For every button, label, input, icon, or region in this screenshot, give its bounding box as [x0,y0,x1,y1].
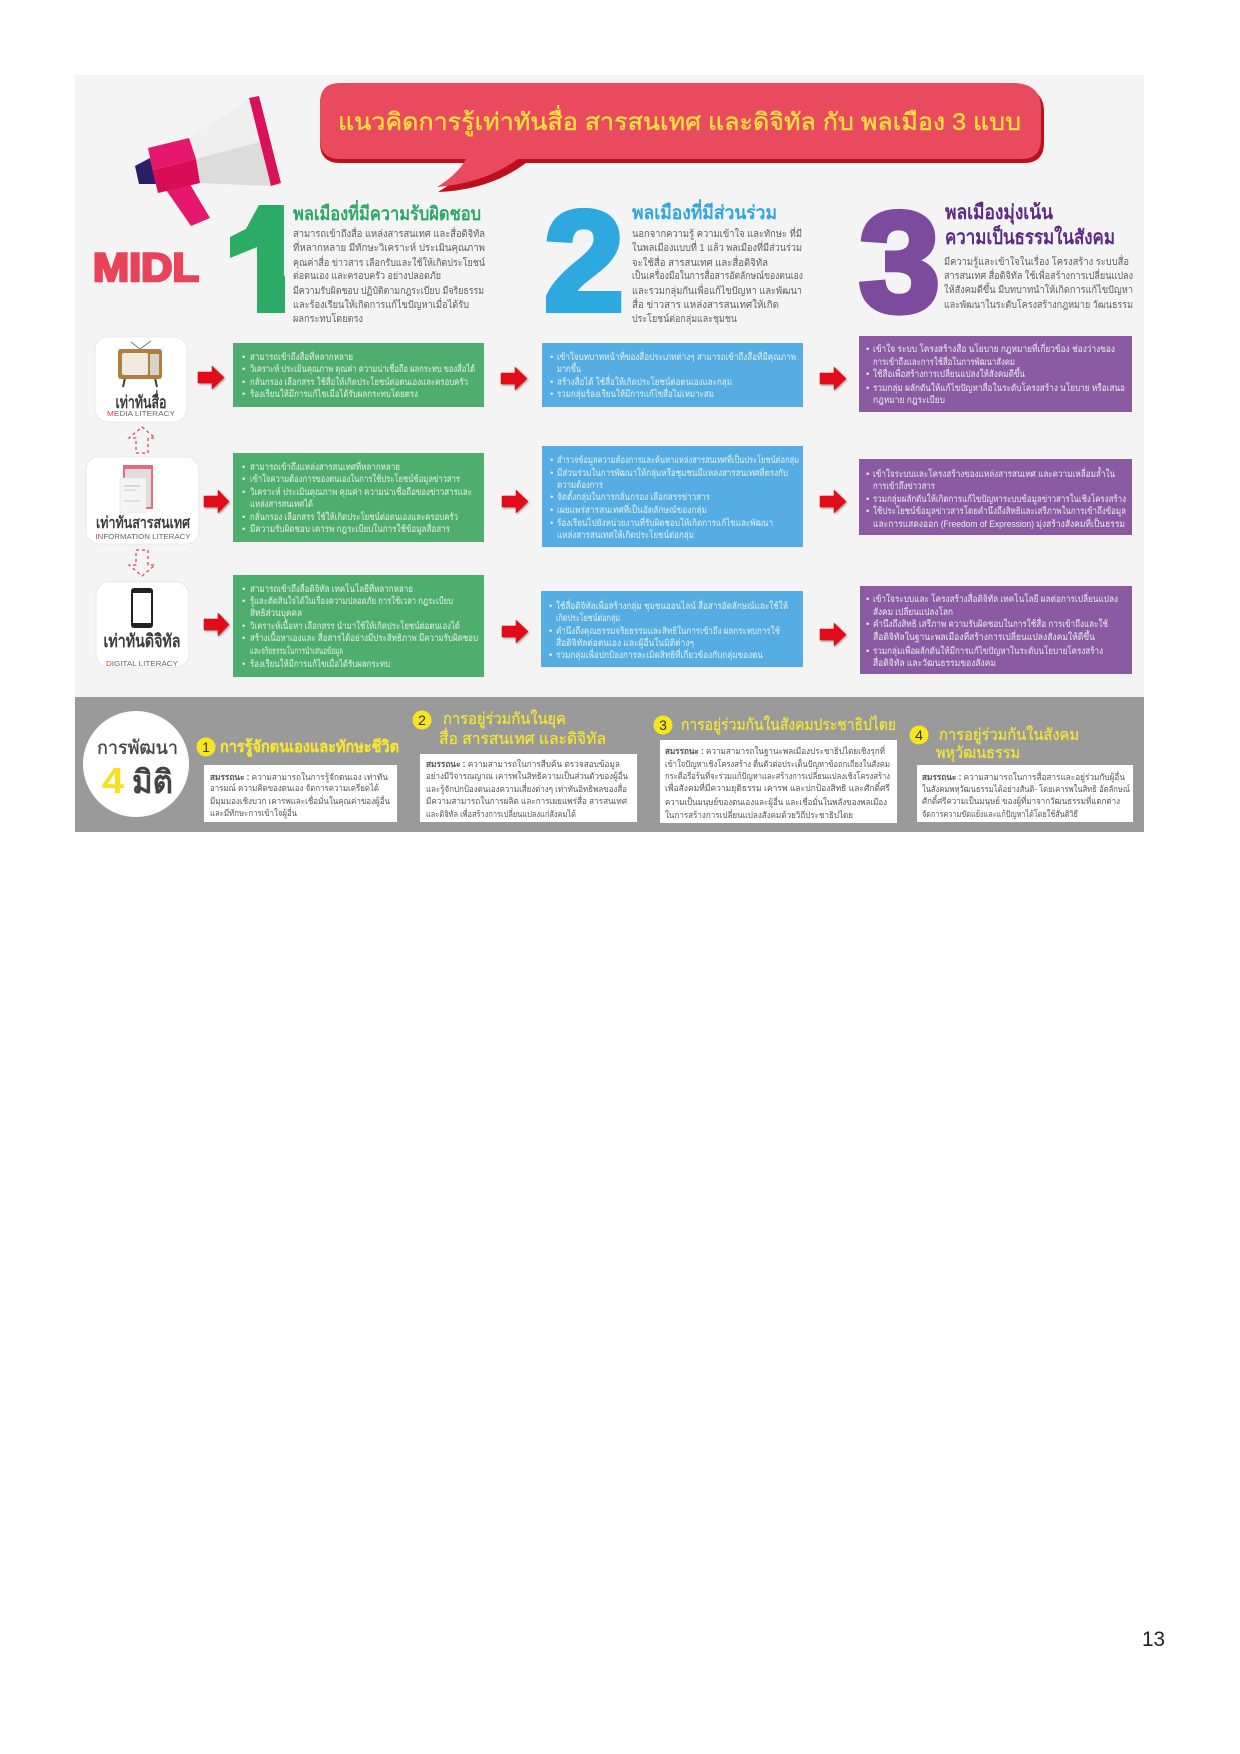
citizen type 1 description: ต่อตนเอง และครอบครัว อย่างปลอดภัย [293,271,441,282]
panel: blue information literacy: • [550,492,553,503]
dimension 3: ในการสร้างการเปลี่ยนแปลงสังคมด้วยวิถีประชาธิปไตย [665,809,853,820]
dimension 1 [196,737,399,822]
dimension 4: ศักดิ์ศรีความเป็นมนุษย์ ของผู้ที่มาจากวัฒนธรรมที่แตกต่าง [922,794,1120,807]
panel: blue information literacy: เผยแพร่สารสนเทศที่เป็นอัตลักษณ์ของกลุ่ม [557,503,707,516]
dimension 4: จัดการความขัดแย้งและแก้ปัญหาได้โดยใช้สันติวิธี [922,809,1078,819]
citizen type 2 description [632,226,803,325]
arrow: digital to purple [820,623,846,646]
panel: purple media literacy: การเข้าถึงและการใช้สื่อในการพัฒนาสังคม [873,355,1015,368]
arrow: media to green [198,366,224,389]
dimension 3: 3 [659,717,667,733]
citizen type 1 heading: พลเมืองที่มีความรับผิดชอบ [293,200,481,225]
citizen type 2 description: และรวมกลุ่มกันเพื่อแก้ไขปัญหา และพัฒนา [632,283,802,297]
panel: blue information literacy: แหล่งสารสนเทศให้เกิดประโยชน์ต่อกลุ่ม [557,529,694,541]
panel: purple information literacy: รวมกลุ่มผลักดันให้เกิดการแก้ไขปัญหาระบบข้อมูลข่าวสารในเชิงโครงสร้าง [873,493,1126,505]
panel: green information literacy: วิเคราะห์ ประเมินคุณภาพ คุณค่า ความน่าเชื่อถือของข่าวสารและ [249,485,472,498]
panel: green information literacy: • [242,487,245,498]
panel: purple information literacy: • [866,494,869,505]
badge: four dimensions: การพัฒนา [97,738,178,759]
citizen type 2 description: สื่อ ข่าวสาร แหล่งสารสนเทศให้เกิด [632,297,779,311]
panel: blue media literacy: • [550,389,553,400]
panel: green information literacy: • [242,462,245,473]
icon: megaphone [135,96,281,226]
panel: purple media literacy: เข้าใจ ระบบ โครงสร้างสื่อ นโยบาย กฎหมายที่เกี่ยวข้อง ช่องว่างของ [873,342,1115,355]
panel: blue media literacy: มากขึ้น [557,362,581,375]
panel: green media literacy: • [242,364,245,375]
citizen type 1 description: คุณค่าสื่อ ข่าวสาร เลือกรับและใช้ให้เกิดประโยชน์ [293,255,485,269]
arrow: digital to green [204,613,229,636]
panel: green information literacy [233,453,484,542]
panel: green information literacy: • [242,512,245,523]
panel: purple digital literacy: รวมกลุ่มเพื่อผลักดันให้มีการแก้ไขปัญหาในระดับนโยบายโครงสร้าง [873,644,1103,657]
panel: green digital literacy: ร้องเรียนให้มีการแก้ไขเมื่อได้รับผลกระทบ [250,657,390,670]
panel: purple digital literacy [860,586,1132,674]
citizen type 2 description: ประโยชน์ต่อกลุ่มและชุมชน [632,312,737,325]
icon: smartphone [131,588,153,628]
panel: purple digital literacy: เข้าใจระบบและ โครงสร้างสื่อดิจิทัล เทคโนโลยี ผลต่อการเปลี่ยนแปลง [873,592,1118,605]
panel: blue media literacy: • [550,352,553,363]
panel: green information literacy: กลั่นกรอง เลือกสรร ใช้ให้เกิดประโยชน์ต่อตนเองและครอบครัว [250,510,458,523]
badge: four dimensions: มิติ [132,764,173,800]
dimension 2 [412,709,637,822]
panel: green information literacy: • [242,524,245,535]
dimension 2: อย่างมีวิจารณญาณ เคารพในสิทธิความเป็นส่วนตัวของผู้อื่น [426,770,628,782]
panel: green media literacy: วิเคราะห์ ประเมินคุณภาพ คุณค่า ความน่าเชื่อถือ ผลกระทบ ของสื่อได้ [249,362,475,375]
panel: green media literacy: • [242,352,245,363]
panel: blue digital literacy: สื่อดิจิทัลต่อตนเอง และผู้อื่นในมิติต่างๆ [556,636,694,649]
MIDL label: MIDL [93,246,199,290]
dimension 2: สื่อ สารสนเทศ และดิจิทัล [439,727,606,748]
panel: green digital literacy: รู้และตัดสินใจได้ในเรื่องความปลอดภัย การใช้เวลา กฎระเบียบ [250,594,453,607]
panel: green digital literacy: • [242,584,245,595]
panel: green digital literacy: สามารถเข้าถึงสื่อดิจิทัล เทคโนโลยีที่หลากหลาย [250,582,413,595]
citizen type 3 heading [945,201,1115,249]
panel: green media literacy: ร้องเรียนให้มีการแก้ไขเมื่อได้รับผลกระทบโดยตรง [250,387,418,400]
citizen type 1 description: ผลกระทบโดยตรง [293,312,363,325]
dimension 3: การอยู่ร่วมกันในสังคมประชาธิปไตย [681,715,896,735]
panel: purple information literacy: และการแสดงออก (Freedom of Expression) มุ่งสร้างสังคมที่เป็นธรรม [873,517,1125,530]
dimension 3: ความเป็นมนุษย์ของตนเองและผู้อื่น และเชื่อมั่นในพลังของพลเมือง [665,796,887,808]
panel: blue digital literacy: • [549,650,552,661]
panel: blue digital literacy: • [549,626,552,637]
dimension 4 [910,725,1133,822]
panel: blue media literacy [542,343,803,407]
panel: green media literacy: กลั่นกรอง เลือกสรร ใช้สื่อให้เกิดประโยชน์ต่อตนเองและครอบครัว [250,375,468,388]
panel: blue information literacy: มีส่วนร่วมในการพัฒนาให้กลุ่มหรือชุมชนมีแหล่งสารสนเทศที่ตรงกับ [557,466,788,479]
dimension 4: สมรรถนะ : ความสามารถในการสื่อสารและอยู่ร่วมกับผู้อื่น [922,771,1125,783]
page number: 13 [1142,1628,1165,1651]
panel: blue information literacy: • [550,468,553,479]
panel: blue information literacy [542,446,803,547]
panel: purple media literacy: • [866,344,869,355]
panel: blue digital literacy: เกิดประโยชน์ต่อกลุ่ม [556,612,620,624]
panel: blue information literacy: • [550,455,553,466]
citizen type 3 description: มีความรู้และเข้าใจในเรื่อง โครงสร้าง ระบบสื่อ [944,254,1129,268]
arrow: dashed up [129,427,155,453]
dimension 2: 2 [418,712,426,728]
badge: four dimensions [83,711,189,817]
panel: green digital literacy: และจริยธรรมในการนำเสนอข้อมูล [250,645,343,657]
citizen type 2 description: ในพลเมืองแบบที่ 1 แล้ว พลเมืองที่มีส่วนร่วม [632,240,802,254]
panel: green media literacy [233,343,484,407]
dimension 1: สมรรถนะ : ความสามารถในการรู้จักตนเอง เท่าทัน [210,772,388,783]
panel: green digital literacy: • [242,659,245,670]
panel: purple information literacy: • [866,469,869,480]
citizen type 1 description: และร้องเรียนให้เกิดการแก้ไขปัญหาเมื่อได้รับ [293,297,469,311]
icon: television [118,341,162,387]
panel: purple digital literacy: • [866,619,869,630]
card: media literacy [95,337,187,422]
panel: purple media literacy: รวมกลุ่ม ผลักดันให้แก้ไขปัญหาสื่อในระดับโครงสร้าง นโยบาย หรือเสนอ [873,381,1125,394]
panel: green media literacy: สามารถเข้าถึงสื่อที่หลากหลาย [250,350,353,363]
panel: green digital literacy: • [242,621,245,632]
panel: purple digital literacy: สังคม เปลี่ยนแปลงโลก [873,605,953,618]
panel: green digital literacy [233,575,484,677]
panel: blue media literacy: รวมกลุ่มร้องเรียนให้มีการแก้ไขสื่อไม่เหมาะสม [557,387,714,400]
panel: green digital literacy: สิทธิส่วนบุคคล [250,608,302,619]
panel: blue information literacy: ความต้องการ [557,480,603,491]
badge: four dimensions: 4 [102,760,124,801]
media literacy Thai label: เท่าทันสื่อ [116,390,166,412]
dimension 3: สมรรถนะ : ความสามารถในฐานะพลเมืองประชาธิปไตยเชิงรุกที่ [665,745,885,757]
panel: blue information literacy: จัดตั้งกลุ่มในการกลั่นกรอง เลือกสรรข่าวสาร [557,490,710,503]
panel: green information literacy: เข้าใจความต้องการของตนเองในการใช้ประโยชน์ข้อมูลข่าวสาร [250,473,460,485]
panel: purple information literacy: การเข้าถึงข่าวสาร [873,481,935,492]
panel: purple media literacy: • [866,383,869,394]
panel: purple information literacy: เข้าใจระบบและโครงสร้างของแหล่งสารสนเทศ และความเหลื่อมล้ำใน [873,467,1115,480]
title speech bubble [320,83,1044,192]
panel: purple digital literacy: • [866,594,869,605]
arrow: information to green [204,490,229,513]
numeral 1: 1 [230,177,288,345]
panel: blue digital literacy: • [549,601,552,612]
arrow: information to purple [820,490,846,513]
title text: แนวคิดการรู้เท่าทันสื่อ สารสนเทศ และดิจิทัล กับ พลเมือง 3 แบบ [338,105,1021,137]
panel: green information literacy: แหล่งสารสนเทศได้ [250,498,313,510]
dimension 2: การอยู่ร่วมกันในยุค [443,709,566,729]
panel: purple media literacy [859,336,1132,412]
arrow: dashed down [129,550,155,576]
panel: blue information literacy: • [550,518,553,529]
panel: blue digital literacy [541,591,803,667]
information literacy Thai label: เท่าทันสารสนเทศ [96,514,191,532]
arrow: digital to blue [502,620,528,643]
citizen type 1 description [293,226,485,325]
citizen type 2 description: เป็นเครื่องมือในการสื่อสารอัตลักษณ์ของตนเอง [632,268,803,282]
citizen type 2 description: จะใช้สื่อ สารสนเทศ และสื่อดิจิทัล [632,255,768,269]
dimension 3: เข้าใจปัญหาเชิงโครงสร้าง ตื่นตัวต่อประเด็นปัญหาข้อถกเถียงในสังคม [665,758,890,769]
arrow: information to blue [502,490,528,513]
panel: green digital literacy: สร้างเนื้อหาเองและ สื่อสารได้อย่างมีประสิทธิภาพ มีความรับผิดชอบ [250,631,478,644]
panel: green information literacy: สามารถเข้าถึงแหล่งสารสนเทศที่หลากหลาย [250,460,400,473]
dimension 1: การรู้จักตนเองและทักษะชีวิต [220,737,399,758]
icon: documents [120,465,153,513]
card: digital literacy [96,582,189,668]
panel: purple media literacy: กฎหมาย กฎระเบียบ [873,394,945,406]
panel: blue information literacy: สำรวจข้อมูลความต้องการและค้นหาแหล่งสารสนเทศที่เป็นประโยชน์ต่อกลุ่ม [557,453,799,466]
dimension 3: เพื่อสังคมที่มีความยุติธรรม เคารพ และปกป้องสิทธิ และศักดิ์ศรี [665,781,890,794]
citizen type 2 heading: พลเมืองที่มีส่วนร่วม [632,199,777,224]
panel: green digital literacy: • [242,596,245,607]
dimension 2: และรู้จักปกป้องตนเองความเสี่ยงต่างๆ เท่าทันอิทธิพลของสื่อ [426,783,627,795]
panel: green media literacy: • [242,389,245,400]
infographic panel background [75,75,1144,832]
panel: purple media literacy: • [866,369,869,380]
panel: purple information literacy [859,459,1132,535]
information literacy English label: INFORMATION LITERACY [96,532,190,541]
citizen type 1 description: สามารถเข้าถึงสื่อ แหล่งสารสนเทศ และสื่อดิจิทัล [293,226,485,240]
numeral 3: 3 [859,183,940,342]
arrow: media to purple [820,367,846,390]
panel: blue information literacy: ร้องเรียนไปยังหน่วยงานที่รับผิดชอบให้เกิดการแก้ไขและพัฒนา [557,516,773,529]
panel: purple information literacy: • [866,506,869,517]
dimension 2: และดิจิทัล เพื่อสร้างการเปลี่ยนแปลงแก่สังคมได้ [426,808,576,819]
citizen type 2 description: นอกจากความรู้ ความเข้าใจ และทักษะ ที่มี [632,226,802,240]
citizen type 3 description: และพัฒนาในระดับโครงสร้างกฎหมาย วัฒนธรรม [944,298,1133,311]
citizen type 3 heading: ความเป็นธรรมในสังคม [945,224,1115,249]
panel: purple digital literacy: สื่อดิจิทัล และวัฒนธรรมของสังคม [873,656,996,669]
panel: blue media literacy: สร้างสื่อได้ ใช้สื่อให้เกิดประโยชน์ต่อตนเองและกลุ่ม [557,375,732,388]
arrow: media to blue [501,367,527,390]
panel: blue information literacy: • [550,505,553,516]
panel: purple media literacy: ใช้สื่อเพื่อสร้างการเปลี่ยนแปลงให้สังคมดีขึ้น [873,367,1025,380]
panel: purple digital literacy: สื่อดิจิทัลในฐานะพลเมืองที่สร้างการเปลี่ยนแปลงสังคมให้ดีขึ้น [873,630,1095,643]
dimension 1: มีมุมมองเชิงบวก เคารพและเชื่อมั่นในคุณค่าของผู้อื่น [210,795,390,807]
dimension 1: และมีทักษะการเข้าใจผู้อื่น [210,807,297,819]
panel: four dimensions band [75,697,1144,832]
dimension 2: มีความสามารถในการผลิต และการเผยแพร่สื่อ สารสนเทศ [426,795,627,806]
citizen type 3 description [944,254,1133,311]
citizen type 3 description: ให้สังคมดีขึ้น มีบทบาทนำให้เกิดการแก้ไขปัญหา [944,282,1133,296]
panel: blue digital literacy: รวมกลุ่มเพื่อปกป้องการละเมิดสิทธิที่เกี่ยวข้องกับกลุ่มของตน [556,648,763,661]
dimension 1: 1 [202,739,210,755]
panel: blue digital literacy: คำนึงถึงคุณธรรมจริยธรรมและสิทธิในการเข้าถึง ผลกระทบการใช้ [556,625,780,637]
panel: green media literacy: • [242,377,245,388]
panel: purple digital literacy: คำนึงถึงสิทธิ เสรีภาพ ความรับผิดชอบในการใช้สื่อ การเข้าถึงและใช้ [873,617,1108,630]
dimension 3 [654,715,897,823]
dimension 1: อารมณ์ ความคิดของตนเอง จัดการความเครียดได้ [210,783,379,793]
panel: purple information literacy: ใช้ประโยชน์ข้อมูลข่าวสารโดยคำนึงถึงสิทธิและเสรีภาพในการเข้าถึงข้อมูล [873,505,1126,517]
citizen type 3 description: สารสนเทศ สื่อดิจิทัล ใช้เพื่อสร้างการเปลี่ยนแปลง [944,268,1133,282]
citizen type 3 heading: พลเมืองมุ่งเน้น [945,201,1053,225]
media literacy English label: MEDIA LITERACY [107,409,175,418]
panel: green information literacy: • [242,474,245,485]
digital literacy English label: DIGITAL LITERACY [106,659,178,668]
dimension 4: พหุวัฒนธรรม [936,745,1020,763]
panel: purple digital literacy: • [866,646,869,657]
dimension 4: ในสังคมพหุวัฒนธรรมได้อย่างสันติ- โดยเคารพในสิทธิ อัตลักษณ์ [922,784,1130,795]
citizen type 1 description: ที่หลากหลาย มีทักษะวิเคราะห์ ประเมินคุณภาพ [293,240,485,254]
panel: green information literacy: มีความรับผิดชอบ เคารพ กฎระเบียบในการใช้ข้อมูลสื่อสาร [250,522,450,535]
dimension 3: กระตือรือร้นที่จะร่วมแก้ปัญหาและสร้างการเปลี่ยนแปลงเชิงโครงสร้าง [665,770,890,781]
panel: green digital literacy: • [242,633,245,644]
panel: blue media literacy: • [550,377,553,388]
citizen type 1 description: มีความรับผิดชอบ ปฏิบัติตามกฎระเบียบ มีจริยธรรม [293,285,484,297]
card: information literacy [86,457,199,544]
digital literacy Thai label: เท่าทันดิจิทัล [104,631,180,651]
dimension 4: 4 [915,727,923,743]
panel: green digital literacy: วิเคราะห์เนื้อหา เลือกสรร นำมาใช้ให้เกิดประโยชน์ต่อตนเองได้ [249,619,460,632]
numeral 2: 2 [544,182,624,341]
dimension 4: การอยู่ร่วมกันในสังคม [939,725,1079,745]
panel: blue digital literacy: ใช้สื่อดิจิทัลเพื่อสร้างกลุ่ม ชุมชนออนไลน์ สื่อสารอัตลักษณ์และใช้ให้ [556,599,788,612]
dimension 2: สมรรถนะ : ความสามารถในการสืบค้น ตรวจสอบข้อมูล [426,759,620,770]
panel: blue media literacy: เข้าใจบทบาทหน้าที่ของสื่อประเภทต่างๆ สามารถเข้าถึงสื่อที่มีคุณภาพ [557,350,796,363]
